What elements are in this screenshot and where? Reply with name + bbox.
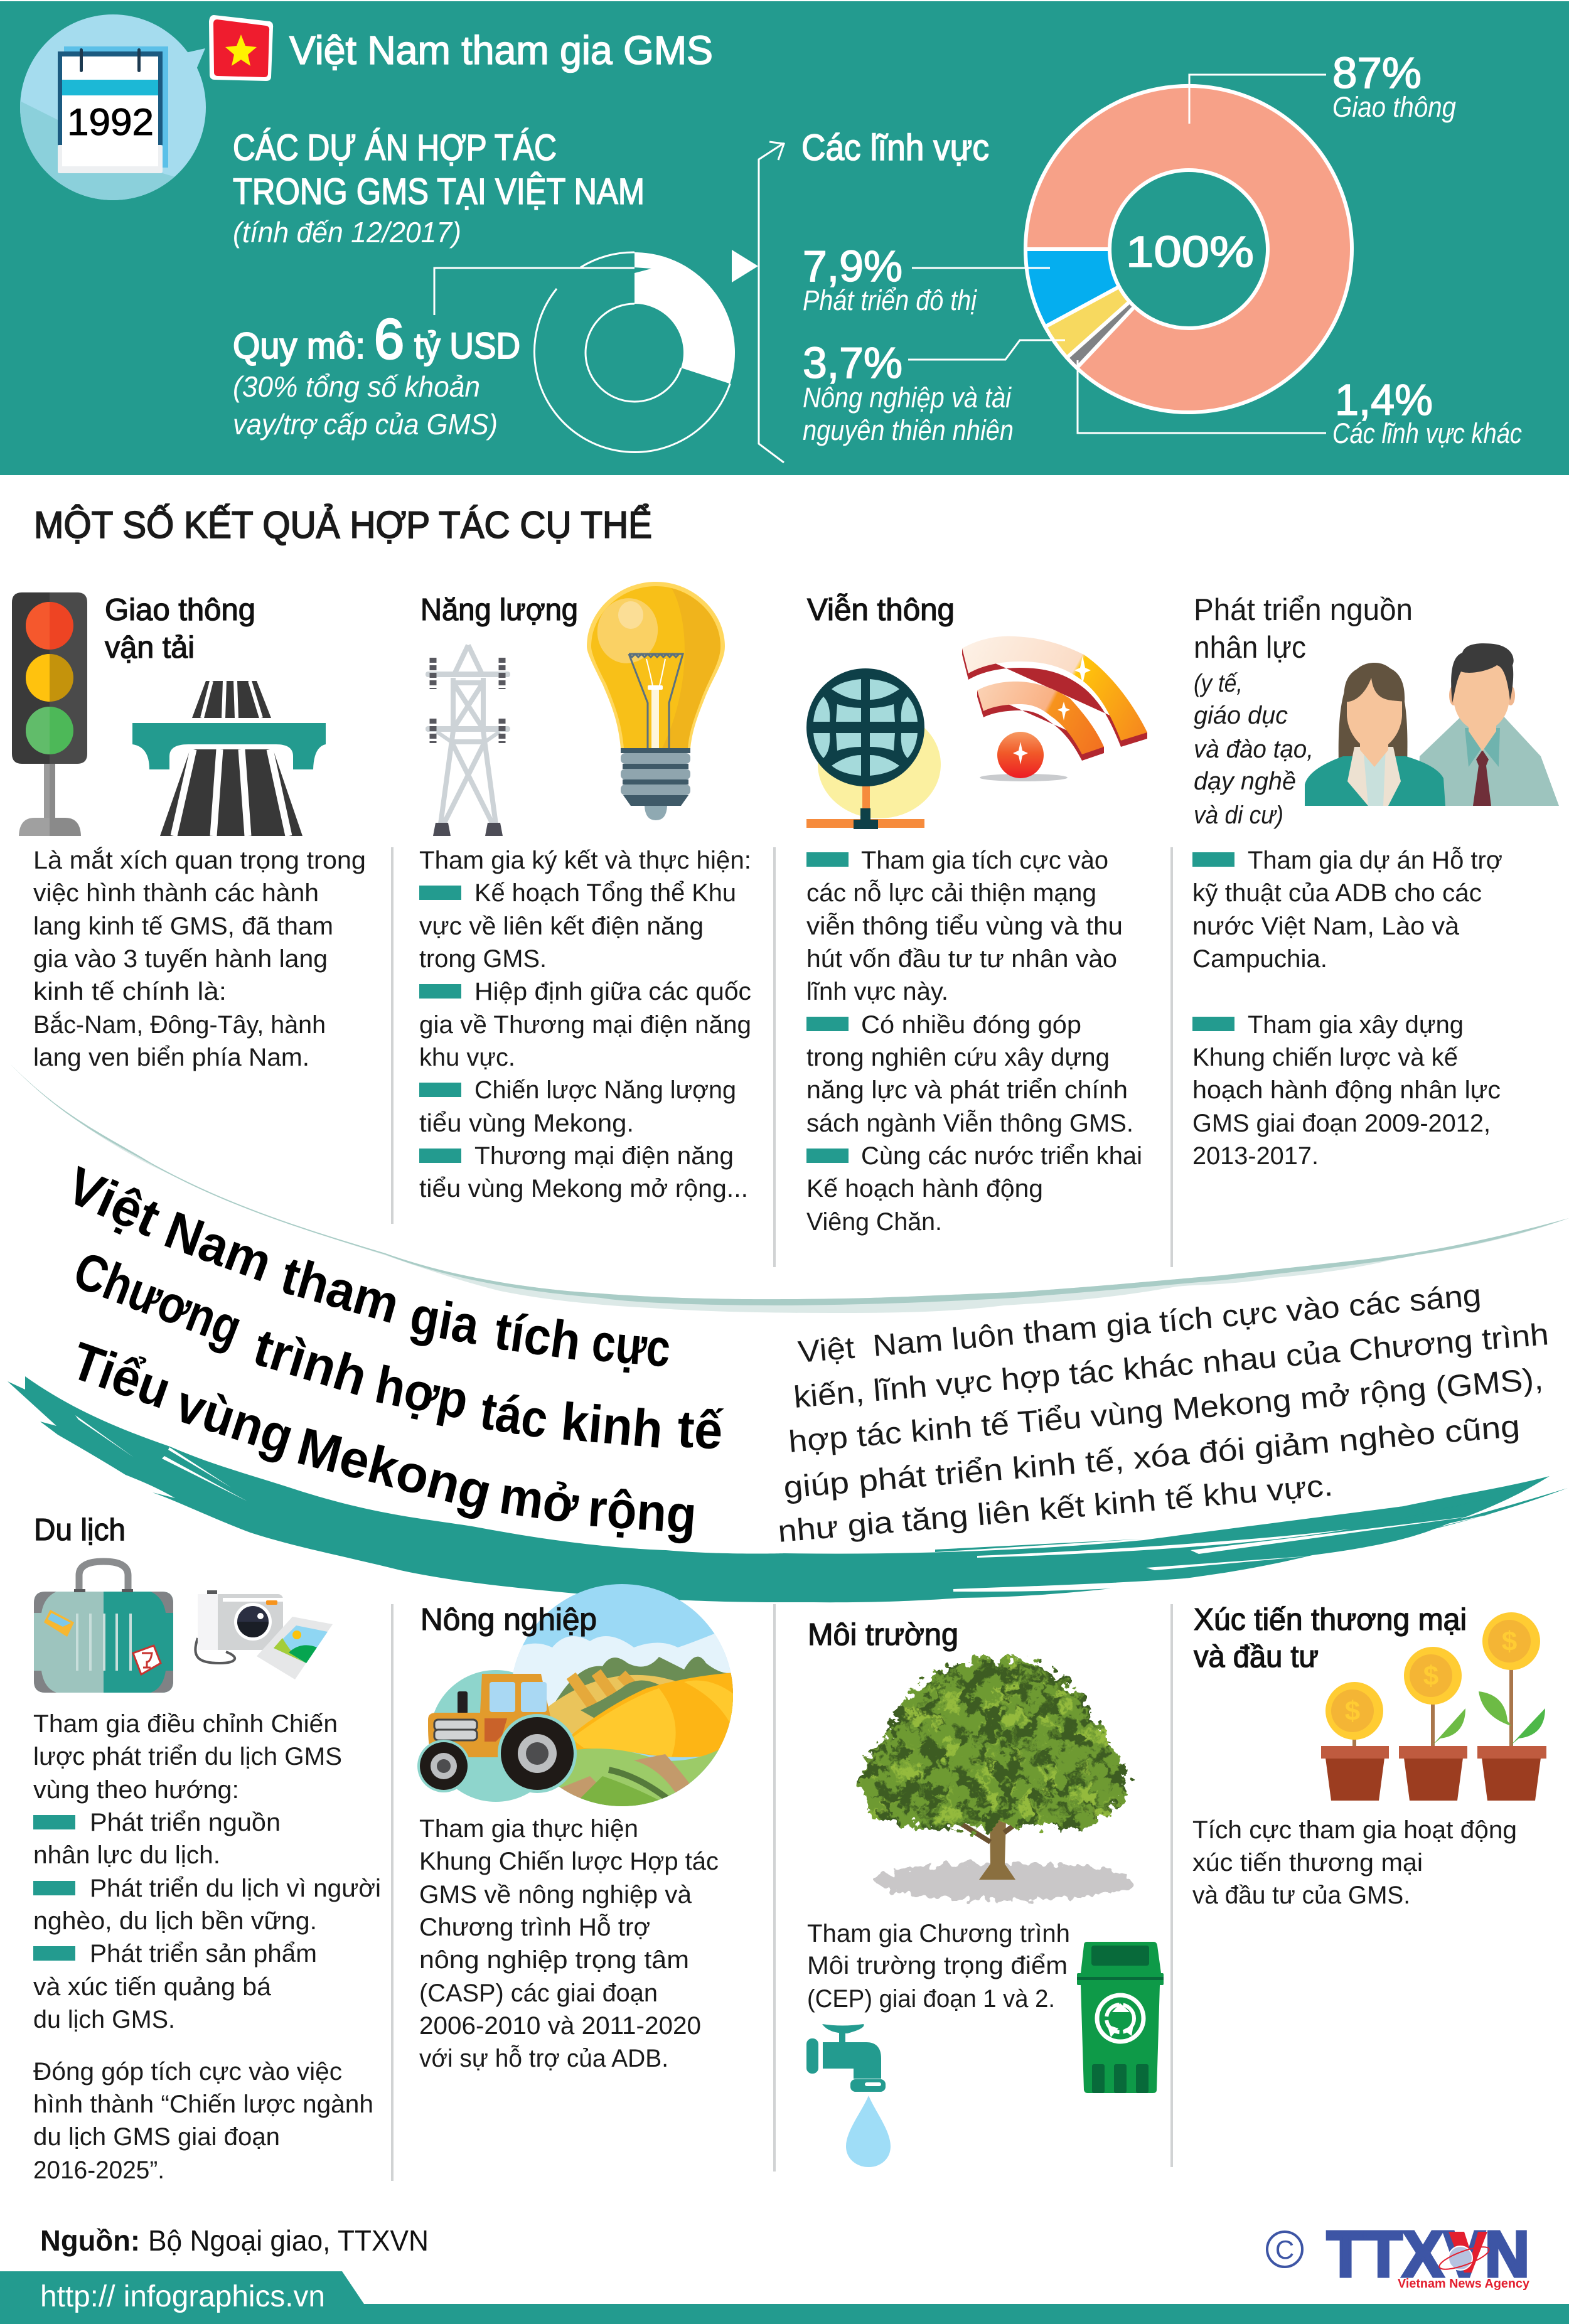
icon: coin plants in pots bbox=[1321, 1612, 1546, 1801]
callout: 7,9 percent urban bbox=[803, 242, 1050, 316]
source line: Nguồn: bbox=[40, 2224, 140, 2257]
text block: xúc tiến thương mại bbox=[1192, 1849, 1423, 1877]
banner headline: cực bbox=[589, 1312, 673, 1378]
text block: Tham gia Chương trình bbox=[807, 1920, 1070, 1947]
text block: Tham gia tích cực vào bbox=[861, 847, 1108, 874]
heading: dạy nghề bbox=[1194, 768, 1296, 795]
heading bbox=[1194, 1603, 1467, 1674]
icon: coin plants in pots: $ bbox=[1345, 1696, 1360, 1727]
text block bbox=[419, 847, 751, 1202]
callout: 3,7 percent agriculture: Nông nghiệp và tài bbox=[803, 382, 1012, 414]
banner paragraph bbox=[776, 1278, 1550, 1549]
panel: environment bbox=[806, 1618, 1164, 2167]
banner headline: trình bbox=[247, 1317, 374, 1407]
heading: Năng lượng bbox=[420, 593, 578, 627]
text block: Có nhiều đóng góp bbox=[861, 1011, 1081, 1039]
callout: 7,9 percent urban: 7,9% bbox=[803, 242, 902, 291]
text block: GMS giai đoạn 2009-2012, bbox=[1192, 1110, 1491, 1137]
text block: Bắc-Nam, Đông-Tây, hành bbox=[33, 1010, 326, 1039]
text block: gia về Thương mại điện năng bbox=[419, 1011, 751, 1039]
text block: nghèo, du lịch bền vững. bbox=[33, 1907, 317, 1935]
text block: sách ngành Viễn thông GMS. bbox=[806, 1109, 1133, 1137]
banner headline: Nam bbox=[158, 1200, 280, 1293]
heading: và đầu tư bbox=[1194, 1640, 1319, 1674]
banner paragraph: Việt Nam luôn tham gia tích cực vào các sáng bbox=[796, 1278, 1482, 1369]
text block: Tham gia xây dựng bbox=[1248, 1011, 1464, 1039]
heading: projects in Vietnam: TRONG GMS TẠI VIỆT NAM bbox=[233, 171, 645, 212]
icon: farm landscape with tractor bbox=[417, 1583, 734, 1814]
text block: Phát triển sản phẩm bbox=[90, 1940, 317, 1968]
text block: tiểu vùng Mekong mở rộng... bbox=[419, 1175, 748, 1202]
text block: Hiệp định giữa các quốc bbox=[474, 978, 751, 1005]
text block: Phát triển nguồn bbox=[90, 1809, 281, 1836]
text block: Khung chiến lược và kế bbox=[1192, 1044, 1458, 1071]
text block: Đóng góp tích cực vào việc bbox=[33, 2058, 342, 2086]
banner paragraph: giúp phát triển kinh tế, xóa đói giảm nghèo cũng bbox=[782, 1410, 1521, 1505]
banner headline: Tiểu bbox=[64, 1331, 178, 1420]
text block: nông nghiệp trọng tâm bbox=[419, 1946, 689, 1974]
callout: 87 percent transport: Giao thông bbox=[1332, 91, 1456, 123]
banner headline: tham bbox=[275, 1245, 406, 1334]
text block: Tham gia dự án Hỗ trợ bbox=[1248, 846, 1502, 874]
scale: 6 billion USD bbox=[233, 308, 520, 441]
text block: Tham gia ký kết và thực hiện: bbox=[419, 847, 751, 874]
text block: du lịch GMS. bbox=[33, 2006, 175, 2033]
scale: 6 billion USD: tỷ USD bbox=[414, 326, 520, 367]
heading: (y tế, bbox=[1194, 670, 1243, 697]
text block: hoạch hành động nhân lực bbox=[1192, 1076, 1501, 1104]
panel: telecom bbox=[806, 593, 1147, 1236]
footer band bbox=[0, 2271, 1569, 2324]
banner headline bbox=[58, 1155, 724, 1545]
heading: projects in Vietnam: (tính đến 12/2017) bbox=[233, 216, 461, 249]
text block: lang kinh tế GMS, đã tham bbox=[33, 913, 333, 940]
callout: 87 percent transport bbox=[1189, 48, 1456, 124]
text block: trong nghiên cứu xây dựng bbox=[806, 1044, 1110, 1071]
banner paragraph: như gia tăng liên kết kinh tế khu vực. bbox=[776, 1469, 1334, 1549]
panel: tourism bbox=[33, 1513, 381, 2184]
text block: 2013-2017. bbox=[1192, 1142, 1319, 1170]
banner headline: Việt bbox=[58, 1155, 169, 1248]
callout: 3,7 percent agriculture bbox=[803, 338, 1065, 446]
banner headline: tích bbox=[491, 1301, 584, 1371]
callout: 1,4 percent other bbox=[1078, 360, 1522, 449]
panel: human resources bbox=[1192, 593, 1559, 1170]
text block: Tham gia thực hiện bbox=[419, 1815, 638, 1843]
callout: 3,7 percent agriculture: 3,7% bbox=[803, 338, 902, 387]
text block: tiểu vùng Mekong. bbox=[419, 1110, 634, 1137]
text block bbox=[1192, 1816, 1517, 1909]
text block: vùng theo hướng: bbox=[33, 1776, 239, 1804]
text block: hình thành “Chiến lược ngành bbox=[33, 2091, 373, 2118]
panel: transport bbox=[12, 592, 366, 1071]
section heading: MỘT SỐ KẾT QUẢ HỢP TÁC CỤ THỂ bbox=[34, 504, 652, 546]
callout: 87 percent transport: 87% bbox=[1332, 48, 1422, 97]
icon: coin plants in pots: $ bbox=[1502, 1626, 1517, 1657]
text block: việc hình thành các hành bbox=[33, 879, 319, 907]
text block: Tham gia điều chỉnh Chiến bbox=[33, 1710, 338, 1738]
banner headline: tế bbox=[676, 1399, 724, 1460]
chart: sector donut bbox=[1025, 86, 1352, 412]
text block: 2006-2010 và 2011-2020 bbox=[419, 2012, 701, 2040]
text block: (CEP) giai đoạn 1 và 2. bbox=[807, 1985, 1055, 2013]
text block: Campuchia. bbox=[1192, 945, 1327, 973]
text block: lĩnh vực này. bbox=[806, 978, 948, 1005]
text block bbox=[419, 1815, 719, 2072]
banner headline: Chương bbox=[67, 1240, 250, 1357]
icon: power pylon bbox=[426, 645, 510, 836]
heading bbox=[105, 593, 255, 665]
banner paragraph: kiến, lĩnh vực hợp tác khác nhau của Chương trình bbox=[792, 1317, 1550, 1415]
banner paragraph: hợp tác kinh tế Tiểu vùng Mekong mở rộng (GMS), bbox=[787, 1362, 1545, 1459]
text block: GMS về nông nghiệp và bbox=[419, 1881, 692, 1909]
text block bbox=[806, 847, 1142, 1236]
banner: lower teal brush stroke bbox=[8, 1376, 1568, 1602]
heading: và di cư) bbox=[1194, 801, 1283, 829]
banner headline: vùng bbox=[169, 1374, 301, 1467]
heading: projects in Vietnam bbox=[233, 127, 645, 249]
icon: camera and photo bbox=[195, 1590, 333, 1679]
heading: Viễn thông bbox=[807, 593, 955, 627]
text block: Chương trình Hỗ trợ bbox=[419, 1913, 650, 1941]
text block: Viêng Chăn. bbox=[806, 1208, 942, 1236]
panel: trade and investment bbox=[1192, 1603, 1546, 1909]
text block: kinh tế chính là: bbox=[33, 978, 227, 1005]
text block: nhân lực du lịch. bbox=[33, 1841, 220, 1869]
scale: 6 billion USD: (30% tổng số khoản bbox=[233, 370, 480, 403]
text block: Thương mại điện năng bbox=[474, 1142, 734, 1170]
icon: suitcase bbox=[34, 1561, 173, 1693]
text block: năng lực và phát triển chính bbox=[806, 1076, 1128, 1104]
icon: Vietnam flag bbox=[209, 15, 273, 81]
text block bbox=[1192, 846, 1502, 1170]
banner headline: rộng bbox=[586, 1478, 699, 1545]
heading: Nông nghiệp bbox=[420, 1603, 597, 1637]
label: 100 percent: 100% bbox=[1126, 227, 1254, 276]
text block: các nỗ lực cải thiện mạng bbox=[806, 879, 1096, 907]
scale: 6 billion USD: vay/trợ cấp của GMS) bbox=[233, 408, 498, 441]
text block: (CASP) các giai đoạn bbox=[419, 1979, 658, 2007]
callout: 1,4 percent other: Các lĩnh vực khác bbox=[1332, 417, 1522, 449]
text block bbox=[33, 1710, 381, 2184]
text block: Môi trường trọng điểm bbox=[807, 1952, 1068, 1979]
icon: highway overpass bbox=[132, 681, 326, 836]
banner headline: hợp bbox=[371, 1354, 473, 1430]
logo: TTXVN Vietnam News Agency: TTXVN bbox=[1327, 2218, 1529, 2290]
text block: khu vực. bbox=[419, 1044, 515, 1071]
callout: 7,9 percent urban: Phát triển đô thị bbox=[803, 284, 978, 316]
text block: với sự hỗ trợ của ADB. bbox=[419, 2044, 668, 2072]
icon: wifi signal bbox=[962, 636, 1147, 781]
icon: woman bbox=[1305, 663, 1445, 806]
heading: Du lịch bbox=[34, 1513, 126, 1547]
logo: TTXVN Vietnam News Agency: C bbox=[1275, 2235, 1294, 2264]
header panel bbox=[0, 1, 1569, 475]
text block: và xúc tiến quảng bá bbox=[33, 1973, 272, 2001]
heading: Giao thông bbox=[105, 593, 255, 627]
chart: small donut 30 percent bbox=[434, 252, 735, 452]
text block: Cùng các nước triển khai bbox=[861, 1142, 1142, 1170]
icon: water tap bbox=[806, 2024, 886, 2092]
text block: 2016-2025”. bbox=[33, 2156, 164, 2184]
scale: 6 billion USD: 6 bbox=[374, 308, 404, 371]
heading: nhân lực bbox=[1194, 631, 1306, 665]
text block: Kế hoạch Tổng thể Khu bbox=[474, 879, 736, 907]
callout: 3,7 percent agriculture: nguyên thiên nhiên bbox=[803, 414, 1014, 446]
icon: calendar 1992 in speech bubble: 1992 bbox=[67, 101, 154, 143]
text block: nước Việt Nam, Lào và bbox=[1192, 913, 1460, 940]
icon: traffic light bbox=[12, 592, 87, 836]
panel: energy bbox=[419, 582, 751, 1202]
text block: Tích cực tham gia hoạt động bbox=[1192, 1816, 1517, 1844]
banner: upper light brush stroke bbox=[10, 1064, 1569, 1313]
icon: man bbox=[1418, 643, 1559, 806]
icon: tree bbox=[860, 1660, 1133, 1900]
banner headline: Mekong bbox=[292, 1416, 498, 1523]
heading: Xúc tiến thương mại bbox=[1194, 1603, 1467, 1637]
heading: projects in Vietnam: CÁC DỰ ÁN HỢP TÁC bbox=[233, 127, 557, 168]
banner headline: gia bbox=[406, 1285, 485, 1356]
icon: recycling bin bbox=[1077, 1942, 1164, 2093]
title: Việt Nam tham gia GMS: Việt Nam tham gia GMS bbox=[289, 28, 713, 73]
heading: Phát triển nguồn bbox=[1194, 593, 1413, 627]
banner headline: tác bbox=[476, 1381, 552, 1450]
text block: trong GMS. bbox=[419, 945, 547, 973]
text block: hút vốn đầu tư tư nhân vào bbox=[806, 945, 1117, 973]
text block: và đầu tư của GMS. bbox=[1192, 1882, 1410, 1909]
text block: lược phát triển du lịch GMS bbox=[33, 1743, 342, 1770]
text block: kỹ thuật của ADB cho các bbox=[1192, 879, 1482, 907]
icon: globe on network stand bbox=[806, 668, 941, 829]
source line: Bộ Ngoại giao, TTXVN bbox=[148, 2224, 429, 2257]
text block: lang ven biển phía Nam. bbox=[33, 1044, 309, 1071]
icon: light bulb bbox=[587, 582, 725, 820]
text block: du lịch GMS giai đoạn bbox=[33, 2123, 280, 2151]
scale: 6 billion USD: Quy mô: bbox=[233, 326, 365, 367]
panel: agriculture bbox=[417, 1583, 734, 2072]
footer band: http:// infographics.vn bbox=[40, 2280, 325, 2313]
text block: Khung Chiến lược Hợp tác bbox=[419, 1848, 719, 1875]
text block: Là mắt xích quan trọng trong bbox=[33, 846, 366, 874]
icon: water drop bbox=[846, 2096, 891, 2167]
heading: giáo dục bbox=[1194, 702, 1288, 729]
icon: calendar 1992 in speech bubble bbox=[20, 14, 206, 200]
callout: 1,4 percent other: 1,4% bbox=[1335, 375, 1433, 424]
text block bbox=[33, 846, 366, 1071]
heading: Các lĩnh vực: Các lĩnh vực bbox=[801, 127, 989, 168]
banner headline: kinh bbox=[559, 1391, 665, 1459]
logo: TTXVN Vietnam News Agency: Vietnam News Agency bbox=[1398, 2277, 1530, 2291]
heading: và đào tạo, bbox=[1194, 736, 1314, 763]
heading: vận tải bbox=[105, 631, 195, 665]
text block: gia vào 3 tuyến hành lang bbox=[33, 945, 328, 973]
text block bbox=[807, 1920, 1070, 2013]
text block: Chiến lược Năng lượng bbox=[474, 1076, 736, 1104]
text block: Phát triển du lịch vì người bbox=[90, 1875, 381, 1902]
icon: coin plants in pots: $ bbox=[1423, 1661, 1438, 1691]
banner headline: mở bbox=[496, 1465, 582, 1534]
text block: vực về liên kết điện năng bbox=[419, 913, 704, 940]
text block: viễn thông tiểu vùng và thu bbox=[806, 912, 1123, 940]
heading bbox=[1194, 593, 1413, 829]
arrow: triangle and bracket bbox=[732, 142, 784, 463]
text block: Kế hoạch hành động bbox=[806, 1175, 1043, 1202]
heading: Môi trường bbox=[808, 1618, 958, 1652]
